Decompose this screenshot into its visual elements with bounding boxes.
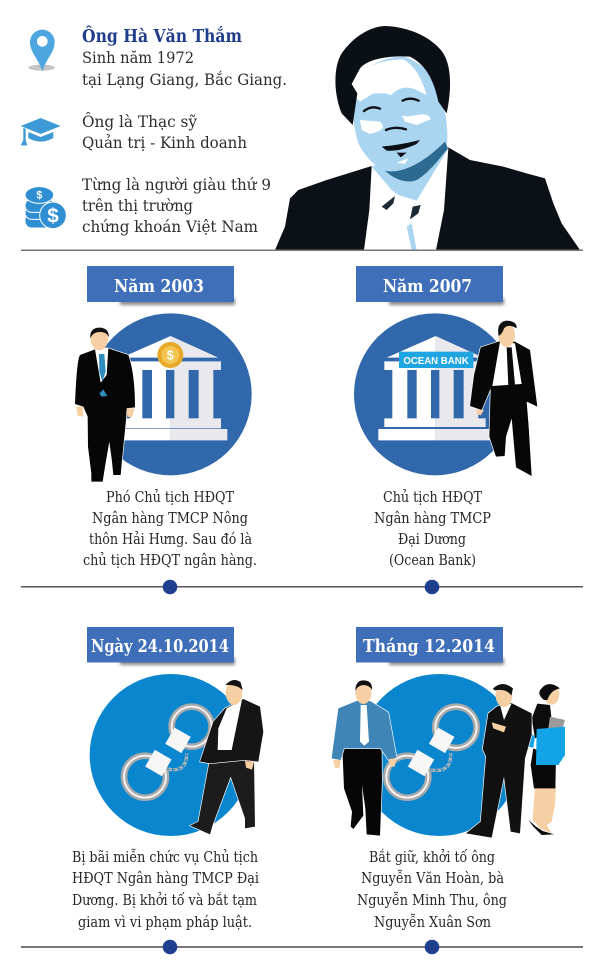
education text: Quản trị - Kinh doanh	[82, 133, 247, 152]
birth text: tại Lạng Giang, Bắc Giang.	[82, 70, 287, 89]
description text: Bị bãi miễn chức vụ Chủ tịch	[72, 848, 258, 866]
description text	[357, 848, 507, 931]
description text: Nguyễn Xuân Sơn	[374, 913, 491, 931]
description text: Đại Dương	[398, 530, 466, 548]
illustration: Ocean Bank and man	[354, 313, 537, 476]
birth text	[82, 48, 287, 89]
banner: Năm 2003: Năm 2003	[114, 276, 204, 297]
icon: bank with coin	[113, 336, 227, 440]
description text: giam vì vi phạm pháp luật.	[78, 913, 252, 931]
description text: Chủ tịch HĐQT	[383, 488, 482, 506]
illustration: handcuffs and three people	[332, 674, 565, 838]
icon: Ocean Bank building	[378, 336, 493, 440]
description text: Nguyễn Văn Hoàn, bà	[361, 869, 504, 887]
banner: Ngày 24.10.2014: Ngày 24.10.2014	[91, 636, 229, 657]
description text: (Ocean Bank)	[389, 551, 476, 569]
description text	[72, 848, 259, 931]
figure: woman with blue folder	[528, 684, 565, 835]
figure: man in dark suit	[466, 684, 532, 838]
illustration: handcuffs and man	[90, 674, 263, 836]
description text: Nguyễn Minh Thu, ông	[357, 891, 507, 909]
description text	[83, 488, 257, 569]
icon: coin stack	[25, 187, 66, 229]
banner: Năm 2007: Năm 2007	[383, 276, 472, 297]
figure: businessman	[75, 328, 135, 482]
panel: 12.2014	[332, 627, 565, 931]
wealth text: trên thị trường	[82, 196, 193, 215]
description text: Bắt giữ, khởi tố ông	[369, 848, 495, 866]
panel: profile header	[21, 26, 580, 250]
timeline: second row	[21, 940, 583, 954]
icon: coin stack: $	[36, 190, 42, 202]
description text: Phó Chủ tịch HĐQT	[106, 488, 234, 506]
name heading: Ông Hà Văn Thắm	[82, 26, 242, 47]
description text: HĐQT Ngân hàng TMCP Đại	[72, 869, 259, 887]
panel: year 2003	[75, 266, 257, 569]
wealth text	[82, 175, 271, 236]
icon: Ocean Bank building: OCEAN BANK	[403, 356, 469, 367]
timeline: first row	[21, 580, 583, 594]
icon: bank with coin: $	[167, 348, 174, 362]
description text: Ngân hàng TMCP Nông	[92, 509, 248, 527]
education text	[82, 111, 247, 152]
description text: Ngân hàng TMCP	[374, 509, 491, 527]
icon: handcuffs	[124, 707, 212, 798]
description text: chủ tịch HĐQT ngân hàng.	[83, 551, 257, 569]
portrait of Hà Văn Thắm	[275, 26, 580, 250]
banner: Tháng 12.2014	[356, 627, 504, 665]
banner: Tháng 12.2014: Tháng 12.2014	[363, 636, 495, 657]
panel: year 2007	[354, 266, 537, 569]
education text: Ông là Thạc sỹ	[82, 111, 197, 131]
birth text: Sinh năm 1972	[82, 48, 194, 67]
figure: businessman in black suit	[470, 321, 537, 476]
wealth text: chứng khoán Việt Nam	[82, 217, 258, 236]
icon: coin stack: $	[47, 205, 59, 228]
wealth text: Từng là người giàu thứ 9	[82, 175, 271, 194]
description text: Dương. Bị khởi tố và bắt tạm	[72, 891, 257, 909]
banner: Ngày 24.10.2014	[87, 627, 235, 665]
icon: location pin	[28, 30, 55, 72]
icon: handcuffs	[386, 707, 477, 798]
panel: 24.10.2014	[72, 627, 263, 931]
icon: graduation cap	[21, 118, 61, 145]
figure: man walking	[190, 680, 263, 834]
banner: Năm 2007	[356, 266, 504, 305]
illustration: bank and man	[75, 313, 252, 482]
banner: Năm 2003	[87, 266, 235, 305]
description text: thôn Hải Hưng. Sau đó là	[89, 530, 252, 548]
description text	[374, 488, 491, 569]
figure: man in blue shirt	[332, 680, 397, 836]
